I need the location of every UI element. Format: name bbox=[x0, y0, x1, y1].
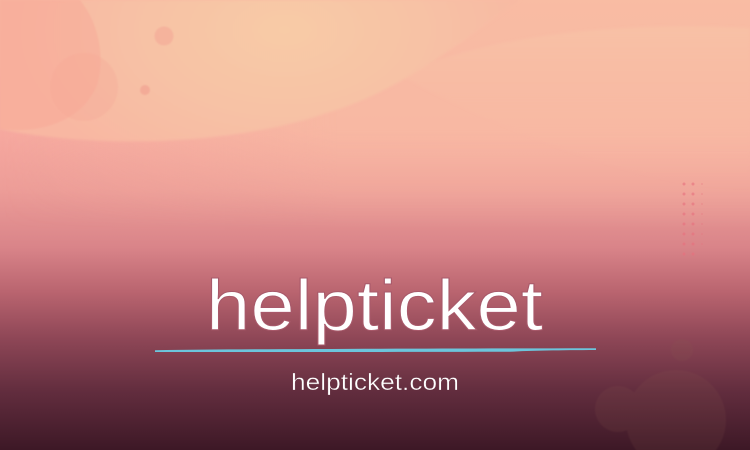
decorative circles top left bbox=[0, 0, 174, 130]
domain name: helpticket.com bbox=[291, 369, 459, 395]
title: helpticket bbox=[206, 267, 543, 346]
top glow wave bbox=[0, 0, 520, 141]
dot grid bbox=[682, 182, 703, 256]
decorative circles bottom right bbox=[595, 339, 726, 450]
underline bbox=[155, 348, 596, 352]
right wave shape bbox=[400, 26, 750, 190]
right side light wash bbox=[184, 32, 750, 198]
